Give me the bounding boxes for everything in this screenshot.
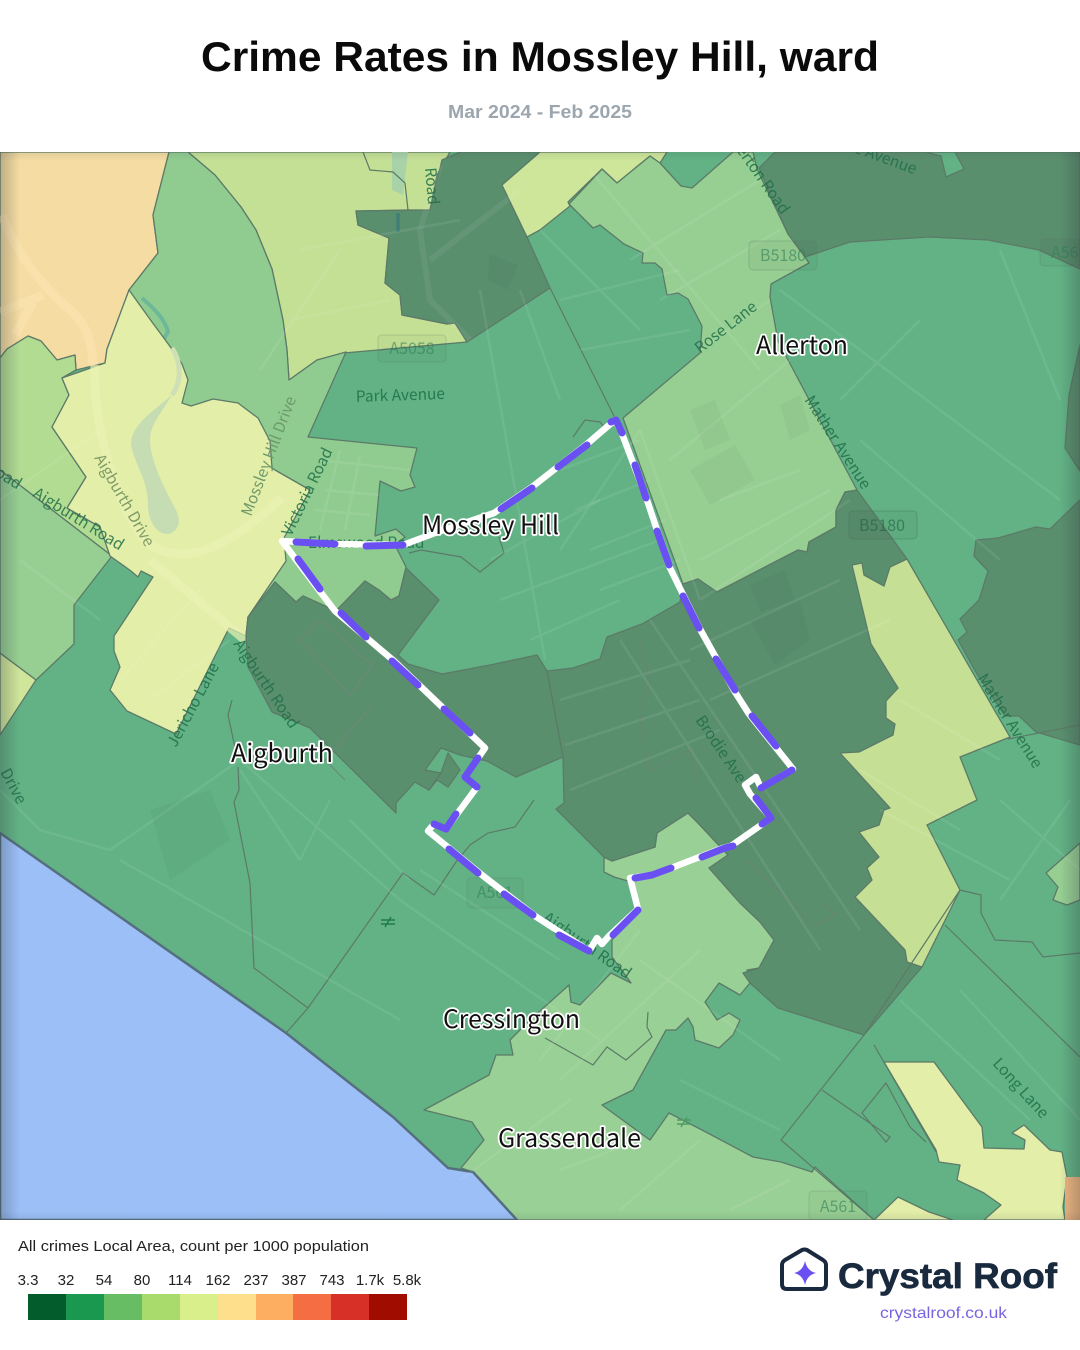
- road shields: A56: [1051, 239, 1079, 263]
- brand url: crystalroof.co.uk: [880, 1305, 1008, 1322]
- legend colour bar: [28, 1294, 407, 1320]
- map edge vignette: [0, 152, 1080, 1220]
- area: far west lime sliver: [0, 653, 36, 735]
- legend scale labels: 80: [134, 1272, 150, 1289]
- icon: Crystal Roof house logo: [782, 1250, 826, 1289]
- place label: Mossley Hill: Mossley Hill: [422, 506, 559, 542]
- road network texture: [0, 165, 1080, 1210]
- area: top centre dark zone: [356, 152, 550, 342]
- road labels: Aigburth Road: [29, 482, 129, 555]
- brand name: Crystal Roof: [838, 1257, 1057, 1296]
- place label: Aigburth: Aigburth: [231, 734, 333, 770]
- subtitle: date range: Mar 2024 - Feb 2025: [448, 102, 632, 122]
- road shields: A5058: [389, 335, 435, 359]
- road labels: Mossley Hill Drive: [235, 393, 301, 519]
- title: Crime Rates in Mossley Hill, ward: [201, 33, 879, 80]
- road labels: Park Avenue: [355, 382, 445, 407]
- legend scale labels: 237: [243, 1272, 269, 1289]
- road labels: Brodie Ave: [691, 710, 752, 787]
- area: north lime zone: [188, 152, 467, 380]
- icon: railway station east: [677, 1117, 691, 1127]
- road labels: Elmswood Road: [308, 531, 425, 553]
- legend scale labels: 1.7k: [356, 1272, 385, 1289]
- area: base mid green: [0, 152, 1080, 1220]
- park stream to lake: [172, 348, 179, 395]
- place label: Allerton: Allerton: [756, 326, 848, 362]
- road labels: Aigburth Road: [539, 906, 636, 983]
- area: south-east pale yellow: [884, 1062, 1067, 1220]
- area: south light green Cressington and Grassendale: [424, 813, 874, 1220]
- area: top lime zone: [502, 152, 667, 237]
- area: east edge light green: [1046, 843, 1080, 905]
- road labels: Long Lane: [988, 1053, 1054, 1123]
- area: east edge dark strip: [1065, 345, 1080, 471]
- park lighter roads: [90, 365, 246, 644]
- legend scale labels: 5.8k: [393, 1272, 422, 1289]
- area: west mid light green: [0, 470, 112, 680]
- area: Calderstones-side park green: [129, 152, 417, 617]
- area: east lime zone: [840, 559, 1010, 967]
- tan zone pale roads: [0, 215, 93, 365]
- road labels: [0, 136, 1054, 1123]
- area: bottom pale yellow: [874, 1197, 953, 1220]
- area: Rose Lane light green zone: [569, 152, 857, 592]
- place label: Cressington: Cressington: [443, 1000, 580, 1036]
- legend scale labels: 743: [319, 1272, 345, 1289]
- road labels: Jericho Lane: [161, 658, 224, 750]
- area: north-west tan high-crime zone: [0, 152, 169, 370]
- water: River Mersey: [0, 833, 517, 1220]
- area: south-west dark zone: [246, 568, 563, 813]
- road labels: e Avenue: [851, 136, 920, 179]
- building blocks: [150, 253, 810, 880]
- road labels: erton Road: [732, 140, 796, 218]
- road labels: Aigburth Drive: [90, 450, 161, 550]
- legend scale labels: 162: [205, 1272, 231, 1289]
- icon: railway station west: [381, 917, 395, 927]
- area: west light green: [0, 336, 112, 556]
- place label: Grassendale: Grassendale: [498, 1119, 641, 1155]
- road labels: Mather Avenue: [800, 391, 877, 493]
- dark zone stream mark: [396, 213, 400, 232]
- area: south-east corner orange: [1065, 1177, 1080, 1220]
- ward boundary: Mossley Hill: [282, 420, 793, 951]
- road labels: Mather Avenue: [973, 669, 1049, 772]
- road labels: Aigburth Road: [229, 634, 305, 732]
- park lake: [131, 395, 179, 534]
- area: Sefton Park pale yellow: [52, 290, 310, 734]
- road shields: [378, 239, 1080, 1220]
- area: east dark zone: [958, 500, 1080, 745]
- area: small dark pocket: [429, 753, 460, 790]
- boundary lines: [228, 152, 1080, 1220]
- legend scale labels: 32: [58, 1272, 74, 1289]
- legend scale labels: [18, 1272, 422, 1289]
- legend scale labels: 3.3: [18, 1272, 38, 1289]
- road shields: B5180: [760, 242, 806, 266]
- legend scale labels: 54: [96, 1272, 112, 1289]
- road labels: Rose Lane: [690, 295, 761, 358]
- legend scale labels: 387: [281, 1272, 307, 1289]
- road shields: A561: [477, 879, 513, 903]
- legend scale labels: 114: [168, 1272, 192, 1289]
- road shields: A561: [820, 1193, 856, 1217]
- park green stream: [142, 298, 168, 340]
- area: central and south-east dark zone: [547, 490, 925, 1035]
- road shields: B5180: [859, 512, 905, 536]
- road labels: Victoria Road: [276, 444, 337, 539]
- legend title: All crimes Local Area, count per 1000 population: [18, 1238, 369, 1255]
- area: north-east dark zone: [759, 152, 1080, 269]
- area: north-east notch: [925, 152, 964, 177]
- road labels: Road: [420, 167, 445, 205]
- north pond and stream: [392, 152, 408, 195]
